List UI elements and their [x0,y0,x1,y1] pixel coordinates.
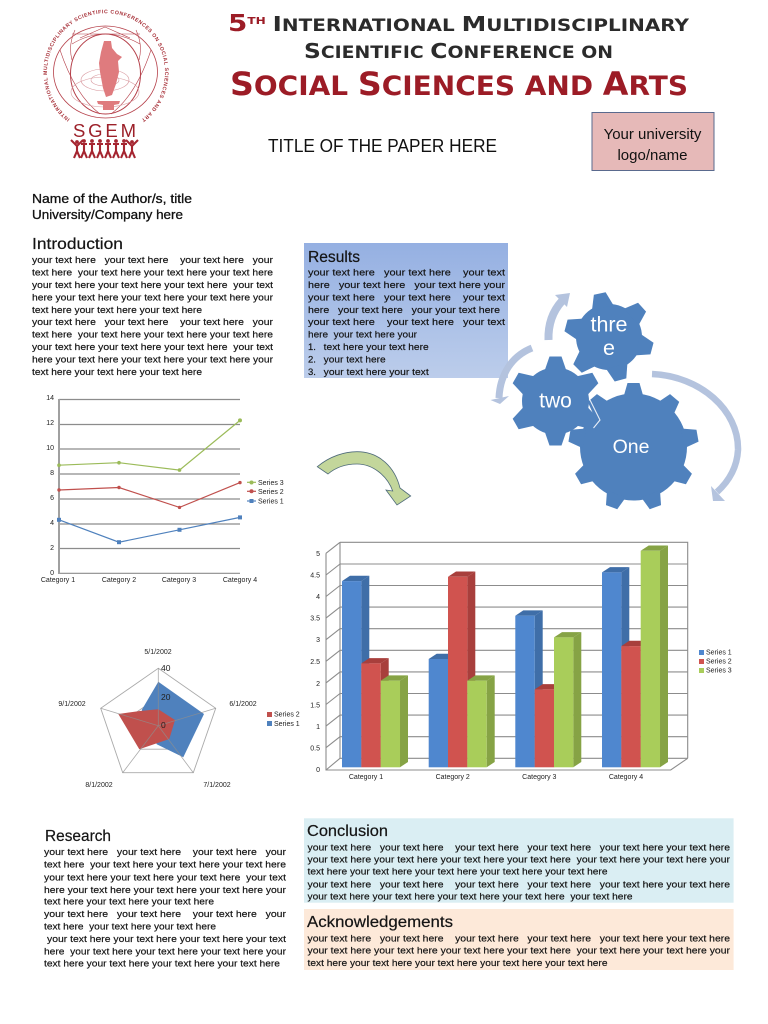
conclusion text [308,842,730,903]
radar category labels [58,649,257,789]
line chart y labels [46,395,54,577]
3D bar chart [310,542,732,781]
line chart x labels [41,577,257,584]
radar legend [267,712,300,728]
bar chart x labels [349,774,643,781]
conclusion text: your text here your text here your text here your text here your text here your text here your [308,855,730,866]
line chart gridlines and axes [59,399,240,574]
radar value labels [161,663,171,730]
bars: category 2 [429,572,495,767]
author block [32,192,192,222]
line chart legend [247,480,284,506]
series 1 line [58,516,242,544]
line chart legend: Series 2 [258,489,284,496]
line chart y labels: 6 [50,495,54,502]
bar chart legend: Series 3 [706,668,732,674]
university logo box: Your university [604,126,702,143]
gear: two: two [539,390,572,413]
university logo box: logo/name [617,147,688,164]
radar legend: Series 1 [274,721,300,728]
radar spokes [101,668,216,773]
arrow: green curved arrow [317,452,411,505]
gear: three: e [603,336,615,360]
logo row of figures [71,139,138,158]
research text: text here your text here your text here [44,897,214,908]
panel: research [44,828,286,970]
bar chart y labels: 2.5 [310,659,320,666]
research text: your text here your text here your text here your text [44,872,286,883]
acknowledgements heading: Acknowledgements [307,914,453,931]
heading line 3: SOCIAL SCIENCES AND ARTS [230,65,688,103]
line chart [41,395,284,584]
introduction heading: Introduction [32,236,123,253]
research text: your text here your text here your text here your text [47,934,286,945]
bar chart y labels: 1.5 [310,702,320,710]
gear: two [510,356,601,446]
bar chart walls and gridlines [326,542,688,770]
research text: here your text here your text here your text here your [44,885,286,896]
bar chart y labels: 3 [316,637,320,644]
arrow: large arc [652,374,738,501]
line chart x labels: Category 3 [162,577,196,584]
bar chart x labels: Category 3 [522,774,557,781]
introduction text: text here your text here your text here [32,367,202,378]
series 2 line [58,481,241,509]
research text: your text here your text here your text here your [44,847,286,858]
bar chart x labels: Category 2 [436,774,470,781]
author block: Name of the Author/s, title [32,192,192,206]
acknowledgements text: your text here your text here your text here your text here your text here your text here [308,933,730,944]
results heading: Results [308,249,360,266]
results text: your text here your text here your text [308,268,505,278]
line chart x labels: Category 4 [223,577,257,584]
conclusion text: your text here your text here your text here your text here your text here [308,892,632,903]
bar chart legend [699,650,732,674]
radar category labels: 6/1/2002 [229,701,257,708]
conclusion text: text here your text here your text here your text here your text here [308,867,608,878]
line chart legend: Series 3 [258,480,284,487]
results text [308,268,505,378]
line chart y labels: 0 [50,570,54,577]
gear: One [568,383,699,511]
panel: results [304,243,508,378]
conclusion text: your text here your text here your text here your text here your text here your text here [308,879,730,890]
bar chart legend: Series 1 [706,650,732,656]
heading line 2: SCIENTIFIC CONFERENCE ON [304,39,613,63]
line chart y labels: 10 [46,445,54,452]
bar chart y labels: 0.5 [310,746,320,752]
logo: SGEM conference emblem [43,10,169,158]
research text: your text here your text here your text here your [44,909,286,920]
results text: your text here [324,354,386,366]
research text: text here your text here your text here your text here [44,959,280,970]
bar chart legend: Series 2 [706,658,732,666]
radar value labels: 40 [161,663,171,673]
results text: your text here your text here your text [308,292,505,304]
line chart y labels: 2 [50,545,54,552]
conference heading [228,11,690,103]
results text: your text here your text here your text [308,317,505,328]
gear cycle diagram [490,291,738,511]
line chart y labels: 8 [50,470,54,477]
bar chart x labels: Category 4 [609,774,643,781]
acknowledgements text: your text here your text here your text here your text here your text here your text here your [308,946,730,957]
line chart y labels: 4 [50,520,54,527]
research text: text here your text here your text here [44,921,216,932]
results text: 1. [308,342,316,353]
bar chart y labels: 4.5 [310,572,320,580]
gear: three: thre [590,313,628,337]
bar chart y labels: 5 [316,551,320,558]
radar category labels: 7/1/2002 [203,782,231,789]
gear: three [563,291,655,383]
introduction text: here your text here your text here your text here your [32,292,273,304]
introduction text: your text here your text here your text here your text [32,342,273,353]
introduction text: here your text here your text here your text here your [32,354,273,366]
bar chart y labels: 4 [316,594,320,601]
introduction text: text here your text here your text here your text here [32,330,273,340]
bar chart y labels: 0 [316,767,320,774]
conclusion heading: Conclusion [307,823,388,840]
logo globe [54,26,158,118]
line chart legend: Series 1 [258,498,284,506]
research heading: Research [45,828,111,845]
conclusion text: your text here your text here your text here your text here your text here your text here [308,842,730,853]
radar grid [101,668,216,773]
panel: conclusion [304,818,734,903]
results text: text here your text here [324,342,429,353]
arrow: left arc [490,348,532,404]
panel: acknowledgements [304,909,734,970]
acknowledgements text: text here your text here your text here your text here your text here [308,958,608,969]
radar legend: Series 2 [274,712,300,718]
panel: introduction [32,236,273,378]
results text: your text here your text [324,367,429,378]
radar series 1 [142,682,204,757]
line chart y labels: 12 [46,420,54,427]
introduction text [32,255,273,378]
radar value labels: 0 [161,720,166,730]
bar chart x labels: Category 1 [349,774,383,781]
bars: category 3 [515,610,581,767]
acknowledgements text [308,933,730,969]
results text: here your text here your [308,330,417,340]
line chart y labels: 14 [46,395,54,402]
introduction text: your text here your text here your text here your [32,317,273,328]
research text: here your text here your text here your text here your [44,947,286,958]
research text [44,847,286,970]
results text: 2. [308,354,316,366]
results text: 3. [308,367,316,378]
series 3 line [58,419,242,471]
introduction text: text here your text here your text here your text here [32,268,273,278]
introduction text: your text here your text here your text here your [32,255,273,266]
radar value labels: 20 [161,692,171,702]
line chart x labels: Category 2 [102,577,136,584]
paper title: TITLE OF THE PAPER HERE [268,136,497,156]
bar chart y labels: 2 [316,681,320,688]
bar chart y labels [310,551,320,774]
introduction text: your text here your text here your text here your text [32,280,273,291]
line chart x labels: Category 1 [41,577,75,584]
results text: here your text here your text here your [308,280,505,291]
heading line 1: INTERNATIONAL M ULTIDISCIPLINARY [273,12,654,36]
bar chart y labels: 1 [316,724,320,731]
radar category labels: 9/1/2002 [58,701,86,708]
bar chart y labels: 3.5 [310,616,320,622]
bars: category 1 [342,576,408,767]
logo wordmark: SGEM [73,120,136,141]
author block: University/Company here [32,208,183,222]
arrow: top arc [548,293,570,340]
logo statue [99,41,122,97]
introduction text: text here your text here your text here [32,305,202,316]
radar category labels: 5/1/2002 [144,649,172,656]
university logo box [592,112,714,170]
heading line 1: 5 [228,11,247,37]
radar category labels: 8/1/2002 [85,782,113,789]
radar series 2 [118,709,175,749]
bars: category 4 [602,546,668,767]
gear: One: One [613,436,649,458]
heading line 1: TH [247,16,266,27]
research text: text here your text here your text here your text here [44,860,286,871]
results text: here your text here your your text here [308,305,500,316]
radar chart [58,649,300,789]
